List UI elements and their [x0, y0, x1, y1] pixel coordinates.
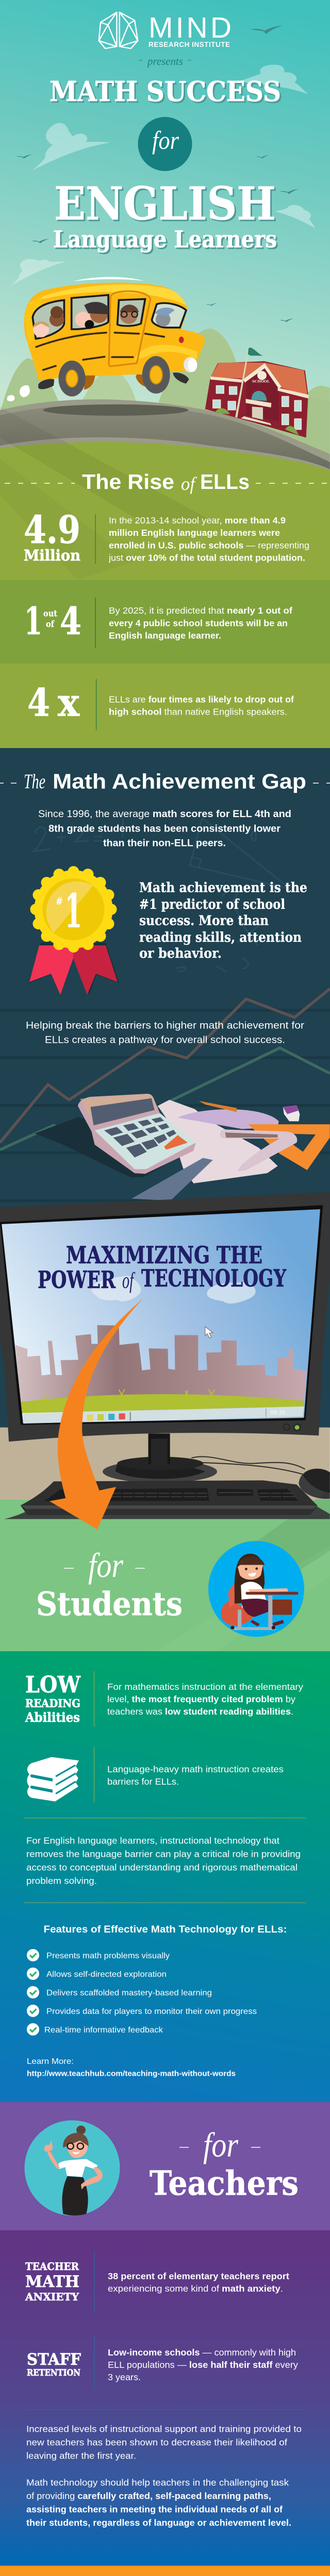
text: math technology should help: assisting teachers in meeting the individual needs of all of	[26, 2504, 283, 2514]
text: instructional technology: For English language learners, instructional technology that	[26, 1835, 279, 1845]
title: Language Learners: Language Learners	[53, 226, 277, 253]
compass	[220, 1129, 297, 1171]
checklist: features of effective math technology: Features of Effective Math Technology for ELLs:	[43, 1924, 287, 1935]
exhaust puffs	[7, 385, 30, 401]
heading: for Teachers: for	[203, 2125, 238, 2164]
logo: MIND Research Institute	[99, 11, 232, 48]
text: instructional support: leaving after the first year.	[26, 2450, 136, 2461]
icon: first place medal: #	[56, 895, 63, 907]
text: math gap intro	[38, 808, 291, 849]
illustration: yellow school bus	[7, 277, 205, 401]
text: learn more link	[27, 2057, 236, 2078]
stat: 1 out of 4: 1	[24, 599, 42, 643]
callout: math achievement statement: reading skills, attention	[139, 930, 302, 945]
birds	[16, 25, 299, 322]
school building	[205, 347, 309, 437]
heading: for Students: Students	[36, 1585, 183, 1623]
checklist: features of effective math technology: Allows self-directed exploration	[46, 1970, 167, 1979]
icon: stack of books: Language-heavy math instruction creates	[107, 1764, 284, 1774]
checklist: features of effective math technology	[27, 1924, 287, 2036]
stat: staff retention: ELL populations — lose half their staff every	[108, 2360, 298, 2370]
panel: hero sky	[0, 0, 330, 474]
stat: low reading abilities: level, the most frequently cited problem by	[107, 1694, 295, 1704]
text: math technology should help: their students, regardless of language or achievement level.	[26, 2517, 291, 2528]
stat: 1 out of 4: English language learner.	[109, 631, 221, 641]
checklist: features of effective math technology: Delivers scaffolded mastery-based learning	[46, 1989, 212, 1997]
stat: staff retention	[27, 2335, 298, 2389]
text: instructional technology: removes the language barrier can play a critical role in providing	[26, 1849, 301, 1859]
title: English: ENGLISH	[56, 178, 277, 232]
icon: first place medal: 1	[65, 884, 82, 939]
bus body	[24, 282, 205, 381]
stat: 4x: ELLs are four times as likely to drop out of	[109, 694, 294, 705]
arrow: orange	[50, 1299, 143, 1529]
icon: stack of books: barriers for ELLs.	[107, 1776, 179, 1787]
panel: Math Achievement Gap	[0, 748, 330, 1428]
text: instructional support: Increased levels of instructional support and training provided to	[26, 2424, 302, 2434]
icon: teacher	[25, 2121, 120, 2215]
heading: The Rise of ELLs: The Rise	[82, 470, 174, 494]
stat: 1 out of 4: By 2025, it is predicted that nearly 1 out of	[109, 605, 292, 616]
stat: 1 out of 4	[24, 598, 292, 648]
stat: teacher math anxiety: TEACHER	[25, 2260, 79, 2273]
stat: low reading abilities	[25, 1671, 303, 1726]
text: instructional technology: problem solving.	[26, 1875, 97, 1886]
stat: 4.9 Million: million English language learners were	[109, 528, 280, 538]
heading: for Students	[36, 1546, 183, 1623]
text: presents: presents	[146, 55, 183, 67]
text: math gap intro: 8th grade students has been consistently lower	[48, 823, 280, 835]
stat: low reading abilities: LOW	[25, 1672, 81, 1698]
heading: The Math Achievement Gap: Math Achievement Gap	[53, 770, 306, 793]
stat: 4.9 Million: enrolled in U.S. public schools — representing	[109, 540, 309, 550]
heading: Maximizing the Power of Technology	[38, 1241, 287, 1294]
monitor screen: 08:32	[270, 1410, 285, 1416]
stat: 1 out of 4: out	[43, 609, 57, 619]
callout: math achievement statement: or behavior.	[139, 946, 222, 961]
stat: 4x: high school than native English speakers.	[109, 707, 287, 717]
logo: MIND Research Institute: RESEARCH INSTITUTE	[148, 41, 230, 48]
pencil	[199, 1101, 237, 1112]
stat: staff retention: STAFF	[27, 2350, 81, 2369]
stat: low reading abilities: teachers was low student reading abilities .	[107, 1706, 293, 1717]
stat: 4x: x	[58, 681, 80, 725]
stat: 4.9 Million	[24, 508, 309, 564]
illustration: keyboard	[4, 1480, 330, 1519]
stat: staff retention: 3 years.	[108, 2372, 141, 2382]
text: helping break the barriers: ELLs creates a pathway for overall school success.	[45, 1035, 285, 1046]
paper	[158, 1100, 278, 1183]
heading: for Teachers	[150, 2125, 299, 2203]
stat: 4.9 Million: 4.9	[24, 508, 80, 552]
badge: for: for	[152, 126, 179, 155]
bus strips	[36, 333, 164, 370]
callout: math achievement statement: #1 predictor of school	[139, 897, 285, 912]
text: math technology should help	[26, 2477, 291, 2528]
text: instructional support	[26, 2424, 302, 2461]
heading: The Rise of ELLs: ELLs	[200, 470, 250, 494]
checklist: features of effective math technology: Provides data for players to monitor their own progress	[46, 2007, 257, 2016]
text: instructional support: new teachers has been shown to decrease their likelihood of	[26, 2437, 287, 2447]
monitor frame	[0, 1192, 330, 1442]
text: math technology should help: of providing carefully crafted, self-paced learning paths,	[26, 2490, 271, 2501]
stat: 4x: 4	[27, 681, 50, 725]
panel: Rise of ELLs background	[0, 407, 330, 748]
stat: teacher math anxiety	[25, 2250, 289, 2313]
text: helping break the barriers	[26, 1020, 305, 1046]
mouse and cable	[191, 1456, 330, 1499]
text: instructional technology	[26, 1835, 301, 1886]
stat: 4.9 Million: In the 2013-14 school year, more than 4.9	[109, 515, 286, 526]
icon: stack of books	[27, 1747, 284, 1802]
monitor stand	[103, 1433, 217, 1483]
text: math gap intro: than their non-ELL peers.	[103, 838, 226, 849]
panel: for Families header	[0, 2566, 330, 2576]
wheels	[38, 336, 197, 396]
stat: 4.9 Million: just over 10% of the total student population.	[108, 552, 305, 563]
monitor screen	[2, 1209, 330, 1499]
illustration: hills, road, school	[0, 329, 330, 474]
illustration: calculator and math tools	[35, 1094, 330, 1201]
protractor	[178, 1109, 279, 1129]
stat: 4x	[27, 679, 294, 730]
desk	[0, 1428, 330, 1501]
badge: for	[138, 117, 192, 171]
eraser	[283, 1105, 300, 1121]
triangle ruler	[248, 1124, 330, 1170]
heading: Maximizing the Power of Technology: TECHNOLOGY	[141, 1264, 287, 1292]
logo: MIND Research Institute: MIND	[148, 11, 232, 44]
stat: staff retention: Low-income schools — commonly with high	[108, 2347, 296, 2358]
text: instructional technology: access to conceptual understanding and rigorous mathematical	[26, 1862, 298, 1872]
decorative chalk math	[34, 817, 290, 972]
title: Math Success: MATH SUCCESS	[50, 75, 281, 108]
illustration: desktop computer	[0, 1192, 330, 1501]
stat: 1 out of 4: 4	[60, 599, 81, 643]
checklist: features of effective math technology: Presents math problems visually	[46, 1952, 170, 1960]
heading: for Students: for	[88, 1546, 123, 1585]
stat: low reading abilities: READING	[25, 1697, 80, 1709]
callout: math achievement statement	[139, 880, 307, 961]
title: Math Success: MATH SUCCESS	[51, 77, 283, 109]
stat: 1 out of 4: of	[46, 619, 55, 630]
panel: for Teachers header	[0, 2102, 330, 2230]
icon: first place medal	[29, 866, 119, 995]
panel: Students content	[0, 1651, 330, 2102]
clouds	[8, 65, 316, 287]
heading: The Rise of ELLs	[5, 470, 327, 494]
panel: for Students header	[0, 1489, 330, 1651]
chart lines background	[0, 989, 330, 1201]
icon: student at desk	[208, 1541, 304, 1637]
title: English: ENGLISH	[54, 177, 276, 230]
heading: The Rise of ELLs: of	[181, 473, 197, 494]
stat: 4.9 Million: Million	[24, 547, 80, 564]
heading: Maximizing the Power of Technology: MAXIMIZING THE	[66, 1241, 262, 1269]
stat: staff retention: RETENTION	[27, 2368, 80, 2378]
school building: SCHOOL	[252, 380, 270, 384]
heading: Maximizing the Power of Technology: of	[122, 1268, 136, 1293]
title: Language Learners: Language Learners	[55, 227, 278, 255]
stat: 1 out of 4: every 4 public school students will be an	[109, 618, 288, 629]
heading: The Math Achievement Gap: The	[24, 770, 45, 793]
panel: Teachers content	[0, 2230, 330, 2566]
ruler	[131, 1158, 213, 1201]
callout: math achievement statement: success. More than	[139, 913, 269, 928]
heading: Maximizing the Power of Technology: POWER	[38, 1266, 116, 1294]
windows	[32, 295, 186, 339]
stat: teacher math anxiety: MATH	[25, 2273, 79, 2291]
text: helping break the barriers: Helping break the barriers to higher math achievement for	[26, 1020, 305, 1031]
checklist: features of effective math technology: Real-time informative feedback	[44, 2026, 163, 2035]
heading: for Teachers: Teachers	[150, 2164, 299, 2203]
text: math gap intro: Since 1996, the average math scores for ELL 4th and	[38, 808, 291, 820]
stat: teacher math anxiety: ANXIETY	[25, 2291, 79, 2303]
stat: teacher math anxiety: 38 percent of elementary teachers report	[108, 2271, 289, 2281]
text: learn more link: http://www.teachhub.com/teaching-math-without-words	[27, 2069, 236, 2078]
text: math technology should help: Math technology should help teachers in the challenging task	[26, 2477, 289, 2487]
stat: low reading abilities: Abilities	[25, 1710, 80, 1725]
calculator	[78, 1094, 195, 1174]
stat: teacher math anxiety: experiencing some kind of math anxiety .	[108, 2283, 283, 2294]
stat: low reading abilities: For mathematics instruction at the elementary	[107, 1682, 303, 1692]
road	[0, 399, 330, 474]
text: learn more link: Learn More:	[27, 2057, 74, 2066]
children in windows	[33, 302, 175, 337]
callout: math achievement statement: Math achievement is the	[139, 880, 307, 895]
